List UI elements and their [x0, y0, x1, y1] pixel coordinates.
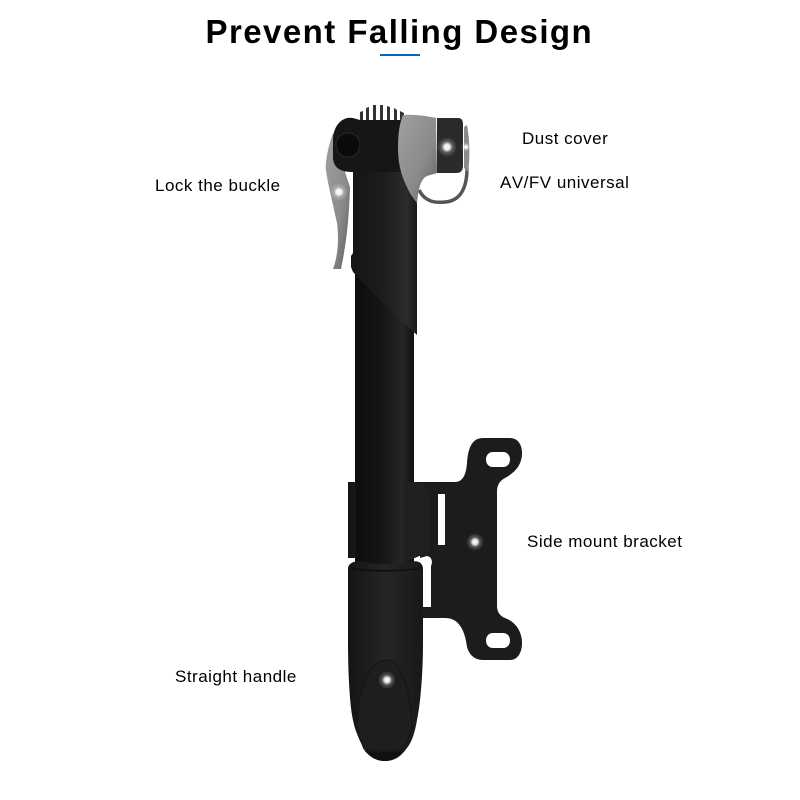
- label: AV/FV universal: AV/FV universal: [500, 173, 629, 192]
- lower tube: [355, 260, 414, 565]
- handle collar: [349, 567, 422, 571]
- label: dust cover: Dust cover: [522, 129, 608, 148]
- label: side mount bracket: Side mount bracket: [527, 532, 682, 551]
- pump head: [333, 105, 410, 172]
- bracket: [420, 438, 522, 660]
- title underline: [380, 54, 420, 56]
- label: straight handle: Straight handle: [175, 667, 297, 686]
- highlights: [330, 137, 484, 689]
- label: lock the buckle: Lock the buckle: [155, 176, 281, 195]
- head bolt: [336, 133, 360, 157]
- bracket cut-out: [420, 556, 432, 607]
- handle panel: [357, 660, 412, 751]
- gray head cover: [398, 115, 437, 203]
- dust cover cap: [437, 118, 463, 173]
- valve gray end: [464, 125, 469, 172]
- valve ring: [419, 168, 467, 202]
- head ribs: [360, 105, 404, 120]
- title: Prevent Falling Design: [206, 13, 593, 50]
- pump upper sleeve: [351, 172, 417, 335]
- handle: [348, 561, 423, 761]
- clamp: [348, 482, 429, 560]
- lock lever: [326, 133, 350, 269]
- handle end cap: [364, 750, 405, 761]
